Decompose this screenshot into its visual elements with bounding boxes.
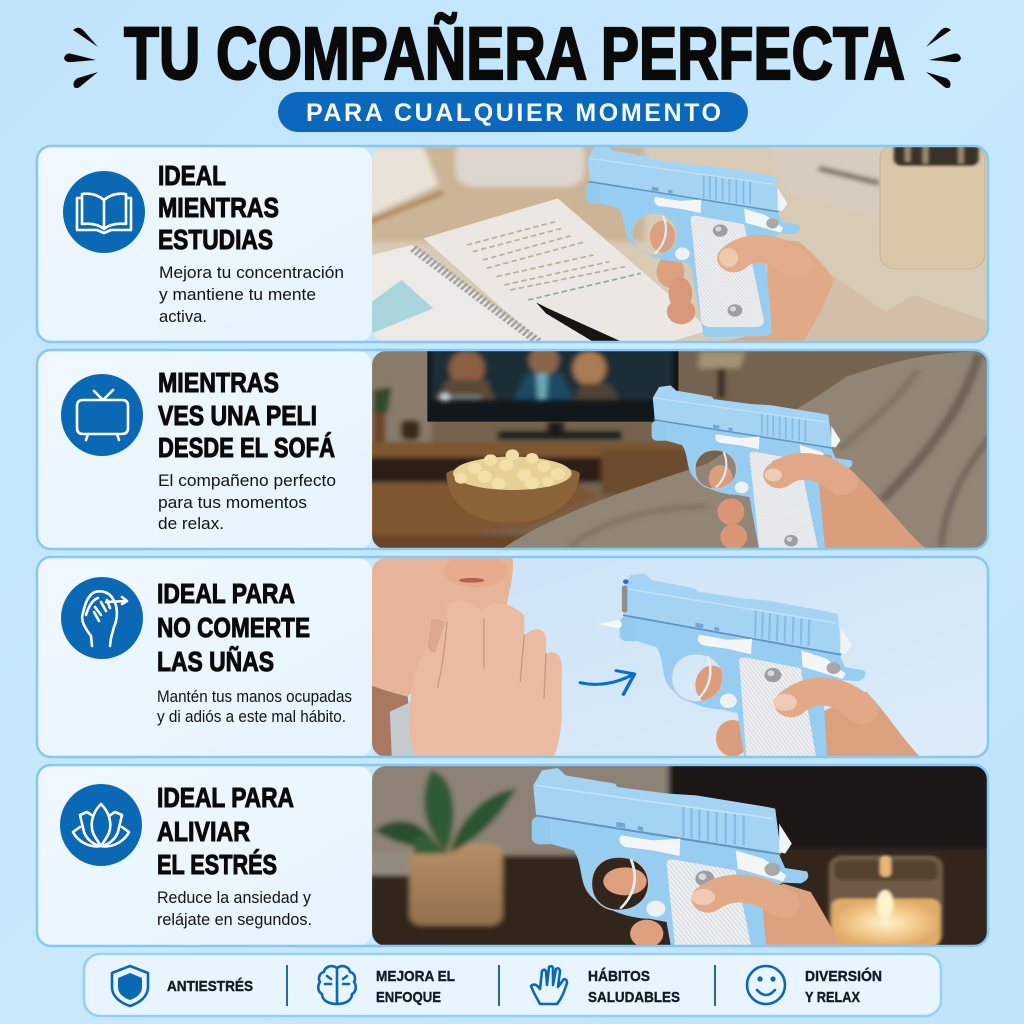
description: relájate en segundos.	[157, 910, 312, 929]
heading: MIENTRAS	[158, 367, 279, 398]
heading	[157, 578, 310, 677]
panel: mientras ves una peli	[37, 345, 1001, 566]
heading: IDEAL PARA	[157, 578, 295, 609]
heading: EL ESTRÉS	[157, 849, 277, 880]
description: para tus momentos	[158, 493, 307, 512]
benefit: hábitos saludables: HÁBITOS	[588, 968, 650, 985]
benefit: diversión y relax: Y RELAX	[805, 989, 860, 1006]
subtitle pill: PARA CUALQUIER MOMENTO	[306, 99, 721, 127]
panel: aliviar el estrés	[36, 764, 990, 948]
icon: lotus	[60, 784, 142, 866]
heading: VES UNA PELI	[158, 400, 317, 431]
description: Reduce la ansiedad y	[157, 888, 311, 907]
photo: mouth biting nails with toy	[372, 558, 987, 756]
description	[157, 687, 352, 726]
description: activa.	[159, 307, 207, 326]
photo: plant and candle with toy	[372, 766, 987, 945]
description	[158, 471, 336, 533]
text card	[37, 147, 372, 342]
benefit: diversión y relax	[747, 966, 882, 1006]
benefits bar	[84, 954, 941, 1016]
benefit: mejora el enfoque: ENFOQUE	[376, 989, 441, 1006]
subtitle pill	[278, 92, 748, 132]
heading	[158, 160, 279, 255]
heading: ESTUDIAS	[158, 224, 273, 255]
text card	[37, 351, 372, 549]
heading	[157, 782, 294, 880]
heading: NO COMERTE	[157, 612, 310, 643]
heading	[158, 367, 335, 463]
icon: right spark lines	[926, 28, 961, 88]
text card	[37, 558, 372, 757]
description: y di adiós a este mal hábito.	[157, 707, 346, 726]
benefit: antiestrés	[112, 966, 253, 1006]
description: Mejora tu concentración	[159, 263, 344, 282]
heading: LAS UÑAS	[157, 646, 274, 677]
panel: no comerte las uñas	[36, 556, 990, 758]
photo: notebook on desk with toy	[372, 147, 987, 341]
benefit: hábitos saludables: SALUDABLES	[588, 989, 680, 1006]
text card	[37, 766, 372, 946]
description	[159, 263, 344, 326]
heading: DESDE EL SOFÁ	[158, 432, 335, 463]
description: de relax.	[158, 514, 224, 533]
benefit: hábitos saludables	[531, 966, 680, 1006]
heading: MIENTRAS	[158, 192, 279, 223]
description: El compañeno perfecto	[158, 471, 336, 490]
benefit: antiestrés: ANTIESTRÉS	[167, 978, 253, 995]
benefit: mejora el enfoque: MEJORA EL	[376, 968, 455, 985]
benefit: diversión y relax: DIVERSIÓN	[805, 967, 882, 985]
icon: hand biting nails	[61, 577, 143, 659]
icon: open book	[63, 171, 145, 253]
heading: IDEAL	[158, 160, 226, 191]
heading: ALIVIAR	[157, 816, 250, 847]
icon: left spark lines	[64, 28, 98, 88]
description	[157, 888, 312, 929]
heading: IDEAL PARA	[157, 782, 294, 813]
panel: mientras estudias	[37, 138, 1001, 355]
icon: television	[61, 374, 143, 456]
photo: sofa with TV and popcorn	[372, 351, 987, 548]
description: Mantén tus manos ocupadas	[157, 687, 352, 706]
description: y mantiene tu mente	[159, 285, 316, 304]
benefit: mejora el enfoque	[318, 966, 455, 1006]
